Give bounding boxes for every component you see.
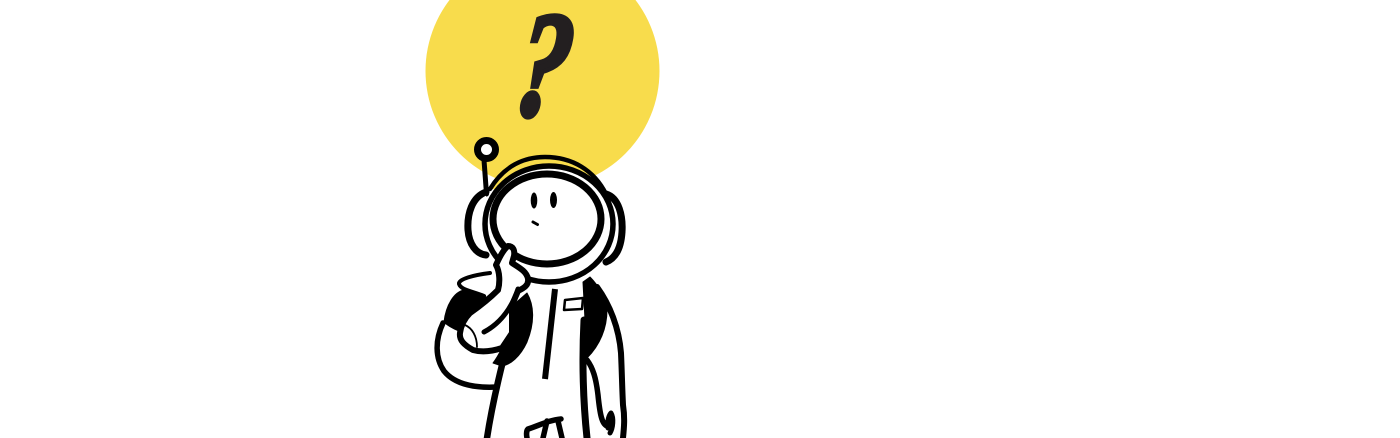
body xyxy=(487,282,590,438)
yellow circle xyxy=(426,0,660,188)
left backpack strap xyxy=(444,290,486,331)
icon: eyes and nose xyxy=(531,192,557,224)
helmet ring xyxy=(485,166,613,282)
name badge xyxy=(564,298,583,310)
icon: antenna xyxy=(478,140,496,194)
held helmet outline xyxy=(437,323,497,387)
arm and hand xyxy=(460,246,528,351)
legs xyxy=(527,419,562,438)
elbow patch xyxy=(465,325,477,347)
zipper line xyxy=(545,289,555,379)
right arm inner xyxy=(587,360,607,426)
face xyxy=(493,174,601,264)
astronaut figure xyxy=(437,140,624,438)
body left edge xyxy=(487,361,503,438)
right ear muff xyxy=(606,194,622,262)
right backpack strap under arm xyxy=(493,293,533,366)
arm inner crease xyxy=(484,289,518,332)
body right edge xyxy=(583,320,587,438)
thumb xyxy=(608,413,613,433)
left ear muff xyxy=(468,192,486,255)
helmet visor arc xyxy=(490,157,606,194)
right arm xyxy=(597,287,624,438)
right backpack xyxy=(583,277,607,358)
helmet brim xyxy=(459,273,490,296)
